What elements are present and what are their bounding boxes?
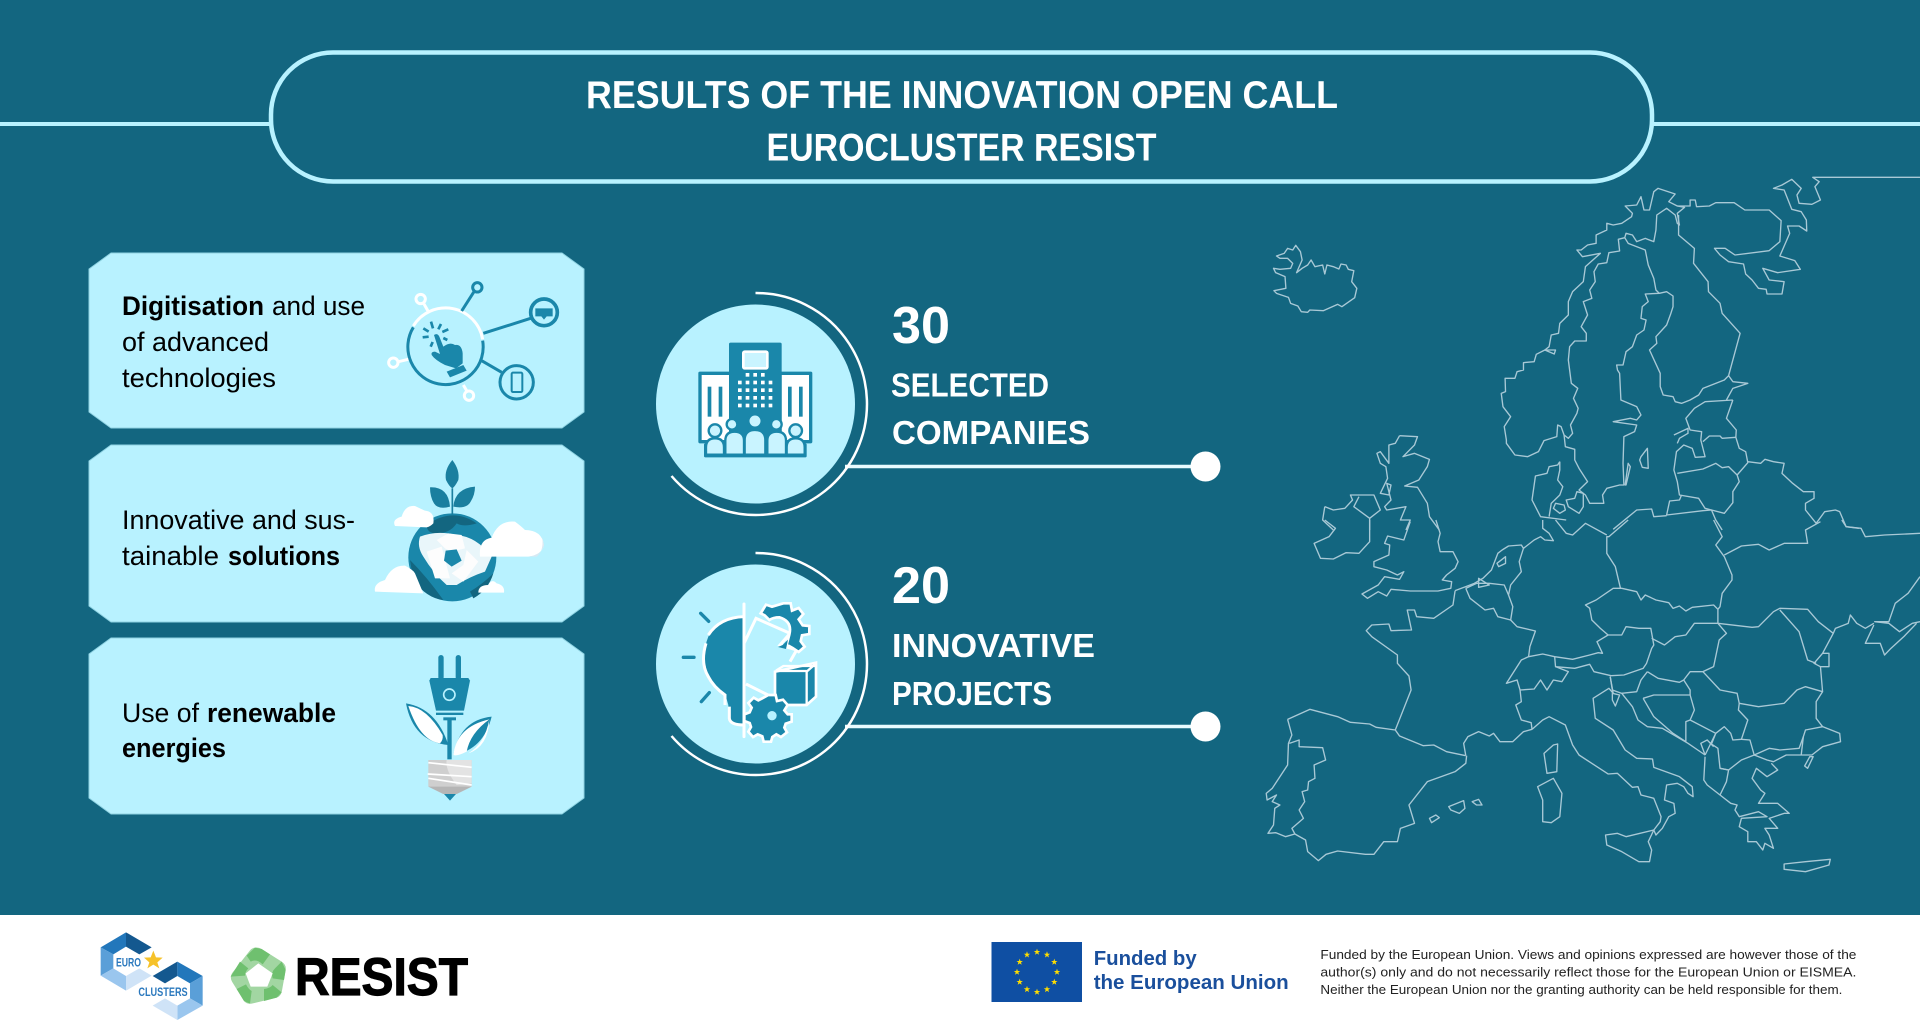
logo: EU flag <box>992 942 1082 1002</box>
icon: touch network <box>389 283 557 400</box>
text: digitisation: Digitisation <box>122 291 264 321</box>
text: 30 selected companies: COMPANIES <box>892 414 1090 451</box>
text: funded by: the European Union <box>1094 971 1289 994</box>
logo: resist <box>231 947 468 1007</box>
text: solutions: tainable <box>122 541 219 571</box>
text: digitisation: of advanced <box>122 327 269 357</box>
text: funded by <box>1094 947 1289 994</box>
text: 30 selected companies <box>891 297 1090 451</box>
text: renewable <box>122 698 336 763</box>
text: renewable: Use of <box>122 698 199 728</box>
text: 20 innovative projects: INNOVATIVE <box>892 627 1095 664</box>
text: digitisation: technologies <box>122 363 276 393</box>
connector line <box>845 712 1220 742</box>
icon: company building and people <box>698 343 812 457</box>
text: disclaimer: Funded by the European Union. Views and opinions expressed are however those of the <box>1320 947 1856 962</box>
circle with ring <box>656 293 867 515</box>
text: solutions: Innovative and sus- <box>122 505 355 535</box>
icon: plug bulb <box>406 655 492 801</box>
title banner <box>0 52 1920 182</box>
title banner: RESULTS OF THE INNOVATION OPEN CALL <box>586 74 1338 117</box>
text: funded by: Funded by <box>1094 947 1197 970</box>
logo: euro clusters: CLUSTERS <box>138 985 188 999</box>
text: digitisation <box>122 291 365 393</box>
text: solutions: solutions <box>228 541 340 571</box>
stat: selected companies <box>656 293 1220 515</box>
panel: sustainable solutions <box>89 445 584 622</box>
text: renewable: energies <box>122 733 226 763</box>
text: 20 innovative projects: PROJECTS <box>892 675 1052 712</box>
connector line <box>845 452 1220 482</box>
icon: recycling globe <box>375 460 544 601</box>
footer band <box>0 915 1920 1033</box>
text: 20 innovative projects <box>892 557 1095 712</box>
logo: euro clusters: EURO <box>116 956 141 970</box>
logo: euro clusters <box>101 932 203 1020</box>
map of Europe outline <box>1266 177 1920 872</box>
stat: innovative projects <box>656 553 1220 775</box>
text: disclaimer: Neither the European Union nor the granting authority can be held responsible for them. <box>1320 982 1842 997</box>
text: solutions <box>122 505 355 571</box>
logo: resist: RESIST <box>295 948 468 1007</box>
title banner: EUROCLUSTER RESIST <box>766 127 1157 170</box>
icon: innovation bulb and gears <box>683 603 816 742</box>
text: digitisation: and use <box>272 291 365 321</box>
text: 30 selected companies: SELECTED <box>891 366 1049 404</box>
circle with ring <box>656 553 867 775</box>
text: 20 innovative projects: 20 <box>892 557 950 615</box>
text: disclaimer: author(s) only and do not necessarily reflect those for the European Union or EISMEA. <box>1320 964 1856 980</box>
text: 30 selected companies: 30 <box>892 297 950 355</box>
panel: renewable energies <box>89 638 584 814</box>
text: disclaimer <box>1320 947 1856 997</box>
text: renewable: renewable <box>207 698 336 728</box>
panel: digitisation <box>89 253 584 428</box>
